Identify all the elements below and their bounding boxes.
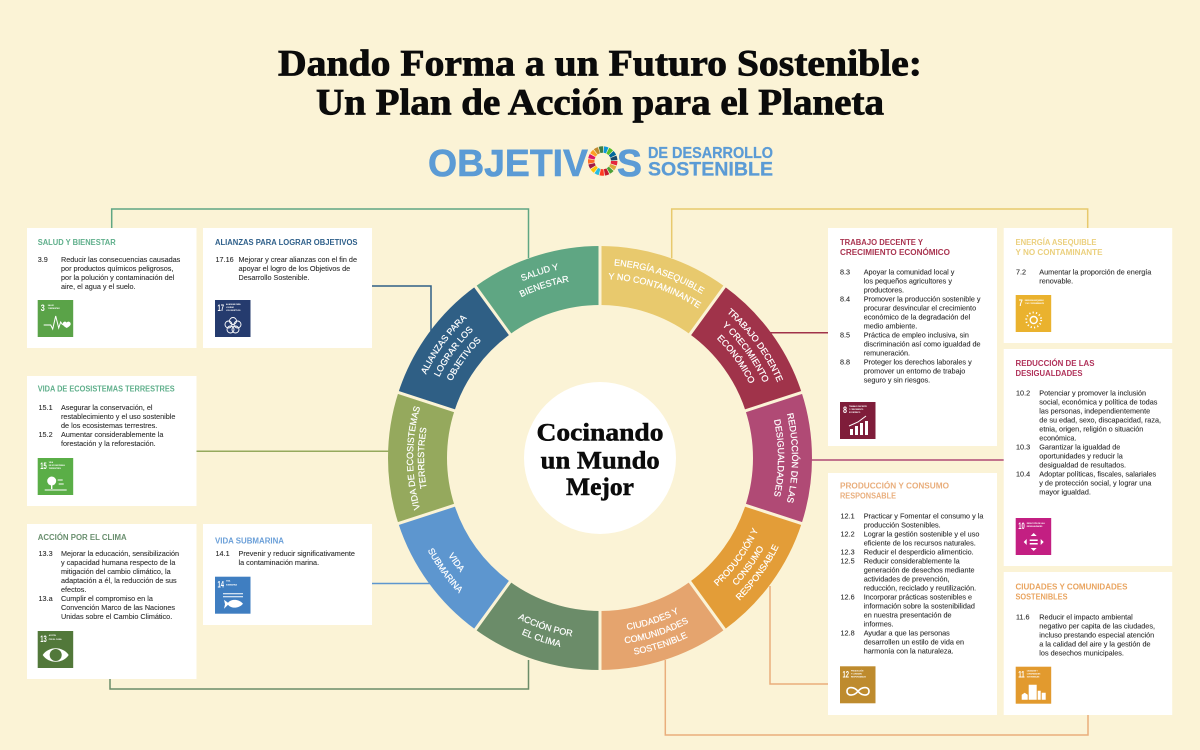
- text block: metas trabajo: Promover la producción sostenible y: [864, 295, 981, 304]
- text block: metas reducción: [1016, 389, 1161, 497]
- icon: ODS 17: [215, 300, 250, 337]
- segment: energía asequible: Y NO CONTAMINANTE: [608, 273, 702, 308]
- icon: ODS 8: Y CRECIMIENTO: [849, 409, 864, 411]
- segment: producción y consumo: PRODUCCIÓN Y: [714, 527, 758, 586]
- text block: metas producción: actividades de prevención,: [864, 574, 950, 583]
- text block: metas reducción: las personas, independientemente: [1039, 407, 1150, 416]
- center circle: Cocinando un Mundo Mejor: [524, 382, 676, 534]
- text block: metas reducción: 10.4: [1016, 470, 1030, 479]
- text block: metas ecosistemas: forestación y la reforestación.: [61, 439, 156, 448]
- text block: metas salud: por productos químicos peligrosos,: [61, 264, 173, 273]
- text block: metas producción: Reducir el desperdicio alimenticio.: [864, 547, 974, 556]
- segment: acción por el clima: [476, 582, 598, 670]
- text block: metas clima: efectos.: [61, 585, 86, 594]
- segment: producción y consumo: [691, 506, 802, 628]
- icon: ODS 7: Y NO CONTAMINANTE: [1025, 302, 1045, 305]
- panel: vida submarina: [203, 524, 372, 625]
- text block: metas trabajo: Apoyar la comunidad local y: [864, 268, 955, 277]
- icon: ODS 11: COMUNIDADES: [1027, 673, 1041, 676]
- text block: metas producción: harmonía con la naturaleza.: [864, 646, 954, 655]
- icon: ODS 13: 13: [40, 634, 47, 645]
- icon: ODS 11: 11: [1018, 670, 1025, 681]
- segment: ciudades y comunidades: SOSTENIBLE: [634, 632, 688, 654]
- text block: metas producción: producción Sostenibles.: [864, 520, 941, 529]
- text block: metas energía: Aumentar la proporción de energía: [1039, 268, 1152, 277]
- text block: metas producción: Practicar y Fomentar el consumo y la: [864, 511, 984, 520]
- panel: acción por el clima: ACCIÓN POR EL CLIMA: [38, 533, 127, 542]
- text block: metas clima: Convención Marco de las Naciones: [61, 603, 175, 612]
- heading: trabajo decente: CRECIMIENTO ECONÓMICO: [840, 248, 950, 257]
- panel: trabajo decente: [828, 228, 997, 446]
- segment: alianzas: OBJETIVOS: [447, 337, 480, 380]
- panel: vida submarina: VIDA SUBMARINA: [215, 536, 284, 545]
- heading: energía: ENERGÍA ASEQUIBLE: [1016, 238, 1097, 247]
- panel: energía asequible: [1004, 228, 1172, 343]
- text block: metas alianzas: [216, 255, 357, 282]
- segment: energía asequible: ENERGÍA ASEQUIBLE: [614, 259, 705, 294]
- icon: ODS 13: ACCIÓN: [49, 634, 56, 637]
- text block: metas trabajo: 8.5: [840, 331, 850, 340]
- heading: reducción: REDUCCIÓN DE LAS: [1016, 359, 1095, 368]
- icon: ODS 8: [840, 402, 876, 439]
- icon: ODS 7: 7: [1019, 298, 1023, 309]
- text block: metas alianzas: apoyar el logro de los Objetivos de: [238, 264, 350, 273]
- text block: metas energía: 7.2: [1016, 268, 1026, 277]
- panel: salud y bienestar: SALUD Y BIENESTAR: [38, 238, 116, 247]
- text block: metas ecosistemas: de los ecosistemas terrestres.: [61, 421, 157, 430]
- text block: metas producción: reducción, reciclado y reutilización.: [864, 583, 976, 592]
- text block: metas reducción: 10.3: [1016, 443, 1030, 452]
- icon: ODS 12: PRODUCCIÓN: [851, 669, 864, 672]
- icon: ODS 10: 10: [1018, 521, 1025, 532]
- text block: metas trabajo: económico de la degradación del: [864, 313, 970, 322]
- icon: ODS 15: [38, 458, 73, 495]
- text block: metas clima: 13.3: [38, 549, 53, 558]
- logo: Objetivos de Desarrollo Sostenible: SOSTENIBLE: [648, 160, 773, 180]
- segment: salud y bienestar: BIENESTAR: [519, 276, 569, 298]
- logo: Objetivos de Desarrollo Sostenible: DE DESARROLLO: [648, 145, 773, 162]
- segment: acción por el clima: EL CLIMA: [522, 628, 560, 647]
- text block: metas trabajo: 8.3: [840, 268, 850, 277]
- text block: metas producción: 12.3: [840, 547, 855, 556]
- icon: ODS 11: CIUDADES Y: [1027, 670, 1039, 673]
- text block: metas ciudades: los desechos municipales.: [1039, 649, 1124, 658]
- text block: metas submarina: 14.1: [216, 549, 230, 558]
- icon: ODS 7: ENERGÍA ASEQUIBLE: [1025, 299, 1045, 302]
- text block: metas trabajo: discriminación así como igualdad de: [864, 340, 981, 349]
- segment: alianzas: [398, 288, 509, 410]
- text block: metas alianzas: Mejorar y crear alianzas con el fin de: [238, 255, 357, 264]
- text block: metas reducción: y de protección social, y lograr una: [1039, 479, 1152, 488]
- icon: ODS 14: VIDA: [226, 580, 231, 583]
- icon: ODS 10: REDUCCIÓN DE LAS: [1027, 522, 1045, 525]
- heading: producción: [840, 481, 949, 500]
- text block: metas salud: por la polución y contaminación del: [61, 273, 175, 282]
- panel: acción por el clima: [27, 524, 196, 679]
- text block: metas clima: Unidas sobre el Cambio Climático.: [61, 612, 172, 621]
- text block: metas reducción: desigualdad de resultados.: [1039, 461, 1126, 470]
- text block: metas reducción: Potenciar y promover la inclusión: [1039, 389, 1146, 398]
- text block: metas ecosistemas: 15.1: [38, 403, 53, 412]
- text block: metas ciudades: negativo per capita de las ciudades,: [1039, 622, 1155, 631]
- icon: ODS 15: TERRESTRES: [49, 468, 62, 470]
- text block: metas producción: en nuestra presentación de: [864, 610, 952, 619]
- text block: metas producción: desarrollen un estilo de vida en: [864, 637, 964, 646]
- heading: energía: Y NO CONTAMINANTE: [1016, 248, 1103, 257]
- segment: salud y bienestar: SALUD Y: [521, 263, 558, 281]
- title: Un Plan de Acción para el Planeta: [316, 82, 884, 123]
- segment: trabajo decente: ECONÓMICO: [717, 334, 754, 383]
- icon: ODS 17: 17: [218, 303, 224, 314]
- text block: metas producción: Incorporar prácticas sostenibles e: [864, 592, 972, 601]
- text block: metas reducción: oportunidades y reducir la: [1039, 452, 1124, 461]
- segment: reducción de las desigualdades: [746, 394, 812, 522]
- text block: metas trabajo: remuneración.: [864, 349, 910, 358]
- text block: metas alianzas: Desarrollo Sostenible.: [238, 273, 309, 282]
- text block: metas producción: [840, 511, 984, 655]
- center circle: Cocinando un Mundo Mejor: un Mundo: [541, 447, 660, 474]
- text block: metas clima: Mejorar la educación, sensibilización: [61, 549, 179, 558]
- icon: ODS 10: DESIGUALDADES: [1027, 525, 1043, 528]
- icon: ODS 13: [38, 631, 73, 668]
- panel: alianzas: [203, 228, 372, 348]
- text block: metas ciudades: a la calidad del aire y la gestión de: [1039, 640, 1151, 649]
- segment: alianzas: LOGRAR LOS: [434, 326, 472, 377]
- heading: energía: [1016, 238, 1103, 257]
- icon: ODS 8: TRABAJO DECENTE: [849, 405, 868, 408]
- icon: ODS 8: ECONÓMICO: [849, 411, 861, 414]
- icon: ODS 7: [1016, 295, 1051, 332]
- icon: ODS 15: DE ECOSISTEMAS: [49, 464, 66, 467]
- text block: metas reducción: etnia, origen, religión o situación: [1039, 425, 1143, 434]
- icon: ODS 12: RESPONSABLES: [851, 675, 867, 678]
- text block: metas submarina: [216, 549, 355, 567]
- logo: Objetivos de Desarrollo Sostenible: [428, 143, 773, 185]
- text block: metas energía: [1016, 268, 1152, 286]
- text block: metas trabajo: Proteger los derechos laborales y: [864, 358, 972, 367]
- panel: producción y consumo: [828, 473, 997, 715]
- icon: ODS 17: LOS OBJETIVOS: [226, 310, 241, 312]
- text block: metas clima: 13.a: [38, 594, 54, 603]
- text block: metas clima: [38, 549, 179, 621]
- text block: metas trabajo: promover un entorno de trabajo: [864, 367, 965, 376]
- segment: acción por el clima: ACCIÓN POR: [518, 614, 572, 636]
- segment: ciudades y comunidades: [602, 582, 724, 670]
- icon: ODS 12: [840, 666, 876, 703]
- text block: metas trabajo: medio ambiente.: [864, 322, 917, 331]
- text block: metas trabajo: [840, 268, 981, 385]
- text block: metas producción: 12.5: [840, 556, 855, 565]
- segment: salud y bienestar: [476, 246, 598, 334]
- panel: salud y bienestar: [27, 228, 196, 348]
- icon: ODS 15: 15: [40, 461, 47, 472]
- text block: metas submarina: Prevenir y reducir significativamente: [238, 549, 355, 558]
- text block: metas energía: renovable.: [1039, 277, 1073, 286]
- segment: alianzas: ALIANZAS PARA: [422, 316, 467, 375]
- heading: ciudades: CIUDADES Y COMUNIDADES: [1016, 582, 1128, 591]
- heading: trabajo decente: TRABAJO DECENTE Y: [840, 238, 924, 247]
- text block: metas trabajo: productores.: [864, 286, 904, 295]
- icon: SDG colour wheel: [586, 145, 619, 177]
- text block: metas producción: eficiente de los recursos naturales.: [864, 538, 976, 547]
- icon: ODS 17: ALIANZAS PARA: [226, 303, 241, 306]
- segment: vida de ecosistemas terrestres: VIDA DE ECOSISTEMAS: [406, 406, 420, 511]
- text block: metas ecosistemas: 15.2: [38, 430, 53, 439]
- panel: vida de ecosistemas terrestres: [27, 376, 196, 506]
- text block: metas reducción: social, económica y política de todas: [1039, 398, 1158, 407]
- text block: metas salud: Reducir las consecuencias causadas: [61, 255, 181, 264]
- text block: metas salud: 3.9: [38, 255, 48, 264]
- text block: metas producción: información sobre la sostenibilidad: [864, 601, 975, 610]
- icon: ODS 14: [215, 577, 250, 614]
- logo: Objetivos de Desarrollo Sostenible: OBJETIV: [428, 143, 589, 185]
- heading: reducción: DESIGUALDADES: [1016, 369, 1083, 378]
- icon: ODS 3: SALUD: [48, 304, 55, 307]
- text block: metas ecosistemas: restablecimiento y el uso sostenible: [61, 412, 175, 421]
- text block: metas ciudades: Reducir el impacto ambiental: [1039, 613, 1133, 622]
- text block: metas ecosistemas: Aumentar considerablemente la: [61, 430, 164, 439]
- heading: trabajo decente: [840, 238, 950, 257]
- text block: metas ciudades: [1016, 613, 1155, 658]
- text block: metas trabajo: seguro y sin riesgos.: [864, 376, 930, 385]
- icon: ODS 12: 12: [842, 669, 849, 680]
- heading: ciudades: [1016, 582, 1128, 601]
- segment: energía asequible: [602, 246, 724, 334]
- text block: metas reducción: mayor igualdad.: [1039, 488, 1091, 497]
- heading: ciudades: SOSTENIBLES: [1016, 592, 1068, 601]
- text block: metas salud: aire, el agua y el suelo.: [61, 282, 136, 291]
- text block: metas reducción: de su edad, sexo, discapacidad, raza,: [1039, 416, 1161, 425]
- segment: producción y consumo: RESPONSABLE: [736, 544, 779, 600]
- icon: ODS 17: LOGRAR: [226, 306, 234, 309]
- segment: producción y consumo: CONSUMO: [733, 546, 763, 585]
- text block: metas trabajo: Práctica de empleo inclusiva, sin: [864, 331, 969, 340]
- icon: ODS 11: SOSTENIBLES: [1027, 677, 1040, 679]
- heading: producción: RESPONSABLE: [840, 491, 897, 500]
- icon: ODS 13: POR EL CLIMA: [49, 638, 62, 641]
- text block: metas reducción: 10.2: [1016, 389, 1030, 398]
- text block: metas producción: 12.2: [840, 529, 855, 538]
- text block: metas trabajo: los pequeños agricultores y: [864, 277, 952, 286]
- segment: ciudades y comunidades: COMUNIDADES: [624, 618, 688, 644]
- text block: metas submarina: la contaminación marina.: [238, 558, 319, 567]
- panel: vida de ecosistemas terrestres: VIDA DE ECOSISTEMAS TERRESTRES: [38, 385, 175, 394]
- text block: metas trabajo: 8.8: [840, 358, 850, 367]
- logo: Objetivos de Desarrollo Sostenible: S: [617, 143, 642, 185]
- text block: metas trabajo: procurar desvincular el crecimiento: [864, 304, 976, 313]
- text block: metas reducción: Garantizar la igualdad de: [1039, 443, 1120, 452]
- title: Dando Forma a un Futuro Sostenible:: [278, 44, 922, 85]
- text block: metas reducción: Adoptar políticas, fiscales, salariales: [1039, 470, 1157, 479]
- segment: trabajo decente: Y CRECIMIENTO: [724, 321, 768, 382]
- text block: metas alianzas: 17.16: [216, 255, 234, 264]
- text block: metas ecosistemas: [38, 403, 175, 448]
- text block: metas reducción: económica.: [1039, 434, 1076, 443]
- chart: donut wheel of goals: [388, 246, 812, 670]
- heading: producción: PRODUCCIÓN Y CONSUMO: [840, 481, 949, 490]
- icon: ODS 3: Y BIENESTAR: [48, 307, 60, 310]
- text block: metas trabajo: 8.4: [840, 295, 850, 304]
- icon: ODS 12: Y CONSUMO: [851, 673, 863, 675]
- text block: metas producción: Reducir considerablemente la: [864, 556, 961, 565]
- segment: trabajo decente: TRABAJO DECENTE: [728, 308, 784, 382]
- text block: metas producción: 12.1: [840, 511, 855, 520]
- heading: reducción: [1016, 359, 1095, 378]
- icon: ODS 14: SUBMARINA: [226, 584, 238, 587]
- text block: metas salud: [38, 255, 181, 291]
- text block: metas clima: y capacidad humana respecto de la: [61, 558, 176, 567]
- icon: ODS 14: 14: [218, 580, 224, 591]
- panel: ciudades y comunidades: [1004, 572, 1172, 715]
- text block: metas ciudades: incluso prestando especial atención: [1039, 631, 1154, 640]
- panel: alianzas: ALIANZAS PARA LOGRAR OBJETIVOS: [215, 238, 358, 247]
- text block: metas producción: Ayudar a que las personas: [864, 628, 950, 637]
- icon: ODS 3: 3: [41, 303, 45, 314]
- text block: metas producción: generación de desechos mediante: [864, 565, 975, 574]
- connector lines: [110, 209, 1088, 735]
- text block: metas producción: 12.8: [840, 628, 855, 637]
- segment: ciudades y comunidades: CIUDADES Y: [626, 607, 677, 630]
- icon: ODS 10: [1016, 518, 1051, 555]
- text block: metas clima: Cumplir el compromiso en la: [61, 594, 154, 603]
- center circle: Cocinando un Mundo Mejor: Cocinando: [536, 420, 664, 447]
- text block: metas ciudades: 11.6: [1016, 613, 1030, 622]
- icon: ODS 8: 8: [843, 405, 847, 416]
- icon: ODS 11: [1016, 667, 1051, 704]
- segment: vida de ecosistemas terrestres: TERRESTRES: [418, 428, 426, 489]
- text block: metas producción: Lograr la gestión sostenible y el uso: [864, 529, 979, 538]
- text block: metas clima: mitigación del cambio climático, la: [61, 567, 172, 576]
- text block: metas producción: informes.: [864, 619, 894, 628]
- segment: reducción de las desigualdades: DESIGUALDADES: [774, 419, 784, 497]
- segment: vida de ecosistemas terrestres: [388, 394, 454, 522]
- icon: ODS 3: [38, 300, 73, 337]
- segment: vida submarina: SUBMARINA: [428, 548, 462, 594]
- panel: reducción de las desigualdades: [1004, 349, 1172, 566]
- icon: ODS 15: VIDA: [49, 461, 54, 464]
- segment: trabajo decente: [691, 288, 802, 410]
- segment: vida submarina: VIDA: [449, 552, 464, 573]
- title: [278, 44, 922, 123]
- segment: vida submarina: [399, 506, 509, 628]
- text block: metas producción: 12.6: [840, 592, 855, 601]
- center circle: Cocinando un Mundo Mejor: Mejor: [566, 474, 634, 501]
- text block: metas clima: adaptación a él, la reducción de sus: [61, 576, 177, 585]
- segment: reducción de las desigualdades: REDUCCIÓN DE LAS: [786, 413, 800, 503]
- text block: metas ecosistemas: Asegurar la conservación, el: [61, 403, 153, 412]
